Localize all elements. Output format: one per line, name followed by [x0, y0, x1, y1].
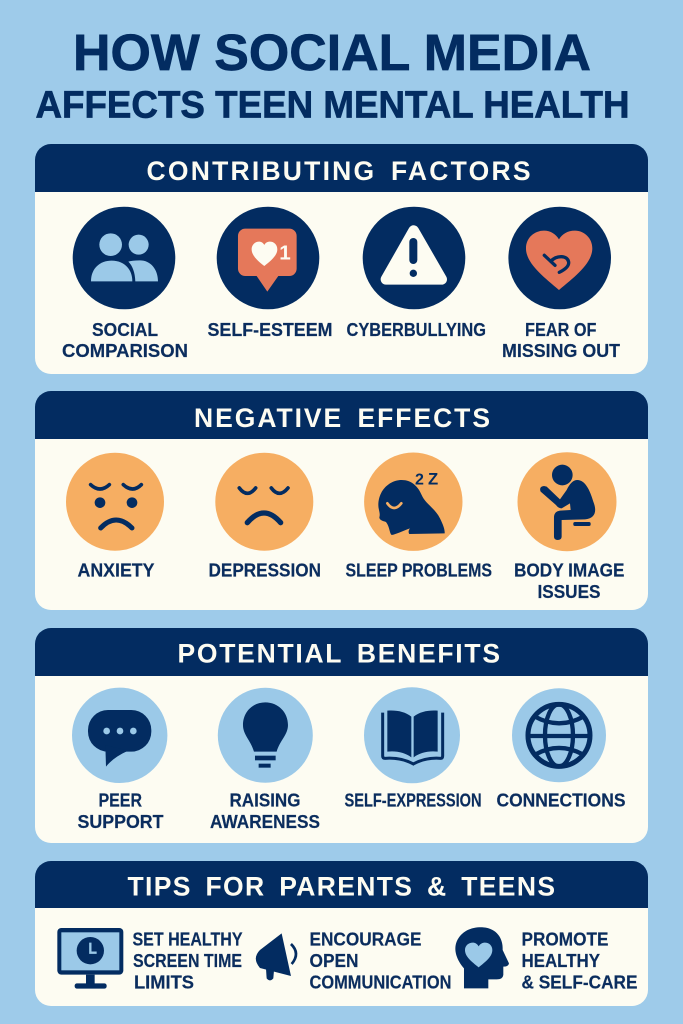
header: potential benefits: POTENTIAL BENEFITS	[178, 638, 500, 668]
panel: tips for parents and teens	[35, 861, 648, 1006]
panel: negative effects	[35, 391, 648, 610]
panel: potential benefits	[35, 628, 648, 843]
icon: megaphone	[256, 933, 296, 980]
label: anxiety: ANXIETY	[78, 560, 154, 580]
label: fear of missing out: FEAR OF	[525, 320, 597, 340]
text: open communication: COMMUNICATION	[310, 972, 452, 992]
icon: depression face	[215, 453, 313, 551]
label: fear of missing out	[502, 320, 620, 361]
text: screen time limits: LIMITS	[134, 972, 194, 992]
header: tips for parents and teens	[35, 861, 648, 908]
label: raising awareness: RAISING	[230, 790, 300, 810]
label: connections: CONNECTIONS	[496, 790, 626, 810]
text: screen time limits: SCREEN TIME	[133, 951, 242, 971]
label: social comparison: COMPARISON	[62, 341, 188, 361]
text: screen time limits	[132, 930, 242, 992]
title	[36, 24, 630, 126]
label: body image issues: BODY IMAGE	[514, 560, 624, 580]
label: raising awareness	[210, 790, 320, 832]
header: potential benefits	[35, 628, 648, 676]
header: contributing factors: CONTRIBUTING FACTORS	[146, 156, 530, 186]
icon: body image	[518, 452, 616, 551]
label: sleep problems: SLEEP PROBLEMS	[346, 560, 492, 580]
panel: contributing factors	[35, 144, 648, 374]
label: peer support	[78, 790, 164, 832]
header: negative effects: NEGATIVE EFFECTS	[194, 403, 490, 433]
panel background	[35, 908, 648, 1006]
text: open communication: ENCOURAGE	[310, 930, 422, 950]
label: cyberbullying: CYBERBULLYING	[346, 320, 486, 340]
icon: self-esteem like bubble: 1	[279, 241, 291, 264]
icon: cyberbullying warning	[363, 207, 465, 309]
icon: sleep problems: 2	[415, 472, 424, 489]
panel background	[35, 192, 648, 374]
label: body image issues: ISSUES	[538, 582, 600, 602]
icon: sleep problems	[364, 452, 462, 551]
text: open communication: OPEN	[310, 951, 358, 971]
icon: anxiety face	[66, 453, 164, 551]
label: raising awareness: AWARENESS	[210, 812, 320, 832]
label: self-esteem: SELF-ESTEEM	[208, 320, 332, 340]
panel background	[35, 439, 648, 610]
icon: fear of missing out heart	[508, 207, 611, 309]
text: open communication	[310, 930, 452, 992]
text: promote healthy self-care: PROMOTE	[522, 930, 608, 950]
header: tips for parents and teens: TIPS FOR PARENTS & TEENS	[128, 872, 555, 902]
header: negative effects	[35, 391, 648, 439]
text: screen time limits: SET HEALTHY	[132, 930, 242, 950]
icon: head with heart	[455, 927, 509, 988]
label: body image issues	[514, 560, 624, 602]
label: depression: DEPRESSION	[208, 560, 321, 580]
icon: social comparison	[73, 207, 175, 309]
icon: raising awareness light bulb	[218, 688, 313, 783]
icon: self-esteem like bubble	[217, 207, 319, 309]
panel background	[35, 676, 648, 843]
icon: connections globe	[512, 688, 606, 782]
icon: peer support speech bubble	[72, 688, 167, 783]
label: fear of missing out: MISSING OUT	[502, 341, 620, 361]
text: promote healthy self-care: HEALTHY	[522, 951, 600, 971]
label: social comparison	[62, 320, 188, 361]
header: contributing factors	[35, 144, 648, 192]
title: AFFECTS TEEN MENTAL HEALTH	[36, 84, 630, 126]
icon: sleep problems: Z	[428, 470, 438, 489]
text: promote healthy self-care: & SELF-CARE	[522, 972, 638, 992]
label: social comparison: SOCIAL	[92, 320, 158, 340]
label: peer support: PEER	[98, 790, 142, 810]
icon: monitor with clock	[57, 928, 123, 989]
text: promote healthy self-care	[522, 930, 638, 992]
label: peer support: SUPPORT	[78, 812, 164, 832]
icon: self-expression open book	[364, 687, 460, 783]
label: self-expression: SELF-EXPRESSION	[344, 790, 482, 810]
title: HOW SOCIAL MEDIA	[73, 24, 591, 81]
